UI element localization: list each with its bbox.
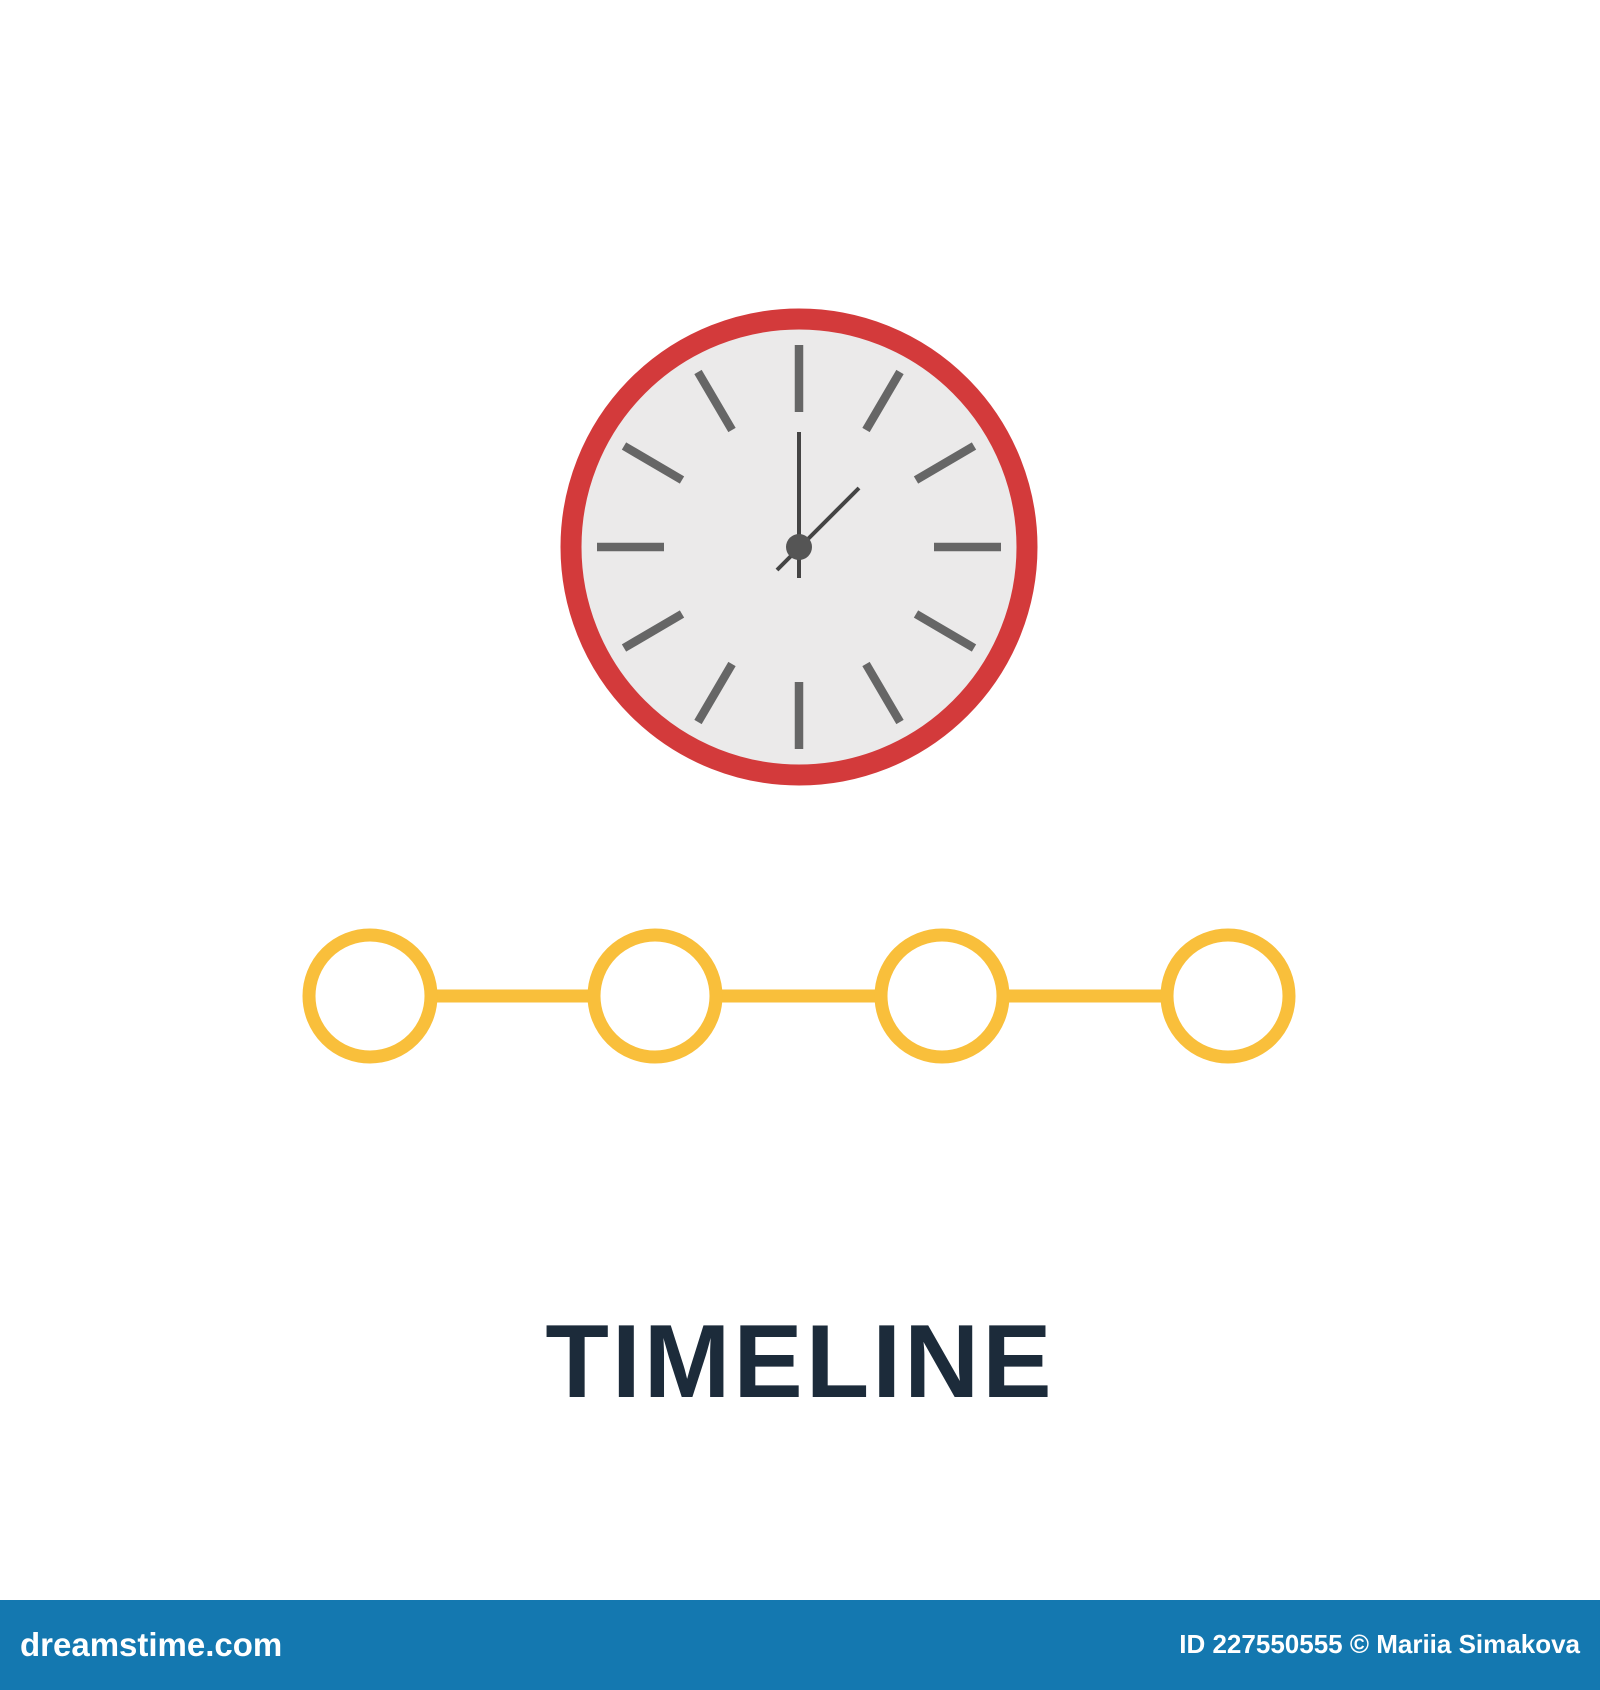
- footer bar: dreamstime.com: [20, 1626, 282, 1663]
- timeline graphic: [302, 928, 1296, 1064]
- footer bar: [0, 1600, 1600, 1690]
- footer bar: ID 227550555 © Mariia Simakova: [1179, 1629, 1580, 1659]
- title: TIMELINE: [545, 1304, 1055, 1420]
